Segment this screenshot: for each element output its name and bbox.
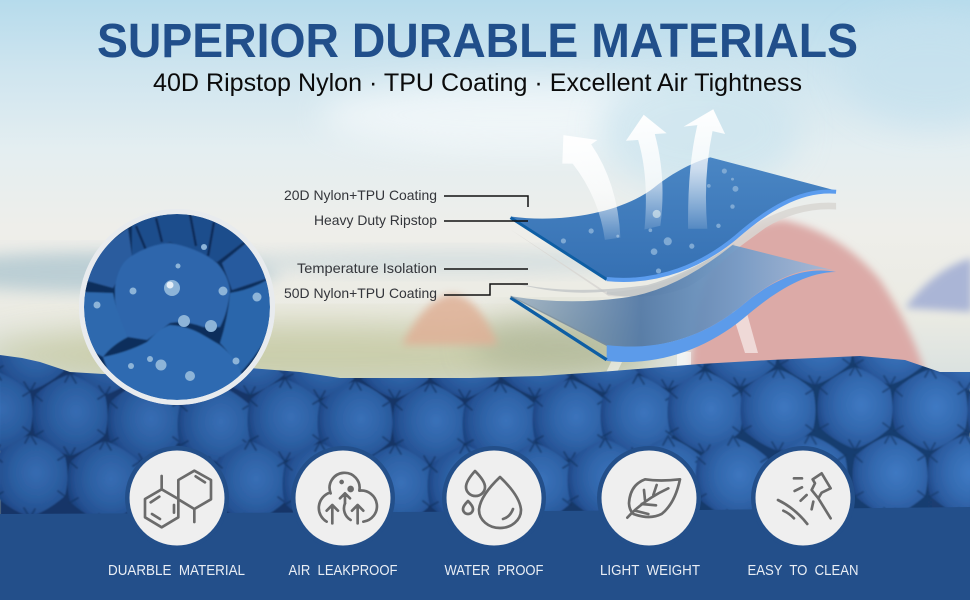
feature: water proof: [442, 446, 546, 579]
left puff: [82, 292, 128, 357]
icon: water drops: [463, 471, 521, 528]
lower sheet thick edge: [607, 271, 836, 362]
lower sheet: [510, 245, 836, 347]
feature: air leakproof: [288, 446, 398, 579]
air mat: [0, 355, 970, 514]
subtitle: 40D Ripstop Nylon · TPU Coating · Excellent Air Tightness: [153, 69, 802, 97]
upper pleated puffs: [84, 228, 132, 288]
feature: water proof: WATER PROOF: [444, 562, 544, 579]
bottom band: [0, 507, 970, 600]
title: SUPERIOR DURABLE MATERIALS: [97, 15, 858, 68]
water droplets: [94, 244, 262, 381]
label: 20D nylon: 20D Nylon+TPU Coating: [284, 187, 437, 203]
label: ripstop: Heavy Duty Ripstop: [314, 212, 437, 228]
feature: light weight: [597, 446, 701, 579]
top sheet edges: [510, 218, 607, 279]
icon: molecule: [145, 471, 211, 527]
bottom puff: [103, 325, 242, 405]
feature: easy to clean: EASY TO CLEAN: [748, 562, 858, 579]
upper grey layer: [510, 203, 836, 297]
fabric layer diagram: [510, 109, 836, 362]
label: 20D nylon: [284, 187, 528, 207]
feature: air leakproof: AIR LEAKPROOF: [288, 562, 398, 579]
right puff: [220, 280, 275, 373]
icon: spray: [778, 473, 831, 524]
magnifier circle: fabric close-up: [79, 209, 280, 405]
feature: easy to clean: [748, 446, 858, 579]
middle grey layer: [510, 244, 734, 297]
white air arrows: [562, 135, 620, 240]
feature: durable material: [108, 446, 245, 579]
top sheet: [510, 157, 836, 279]
central puff: [115, 243, 230, 340]
feature: durable material: DUARBLE MATERIAL: [108, 562, 245, 579]
water droplets: [561, 168, 738, 274]
label: temperature isolation: Temperature Isolation: [297, 260, 437, 276]
callout labels: [284, 187, 528, 301]
icon: leaf: [627, 479, 680, 518]
label: 50D nylon: [284, 284, 528, 301]
label: 50D nylon: 50D Nylon+TPU Coating: [284, 285, 437, 301]
feature: light weight: LIGHT WEIGHT: [600, 562, 700, 579]
icon: trees with arrows: [319, 473, 377, 523]
lower exhaust arrows behind fabric: [601, 306, 758, 383]
